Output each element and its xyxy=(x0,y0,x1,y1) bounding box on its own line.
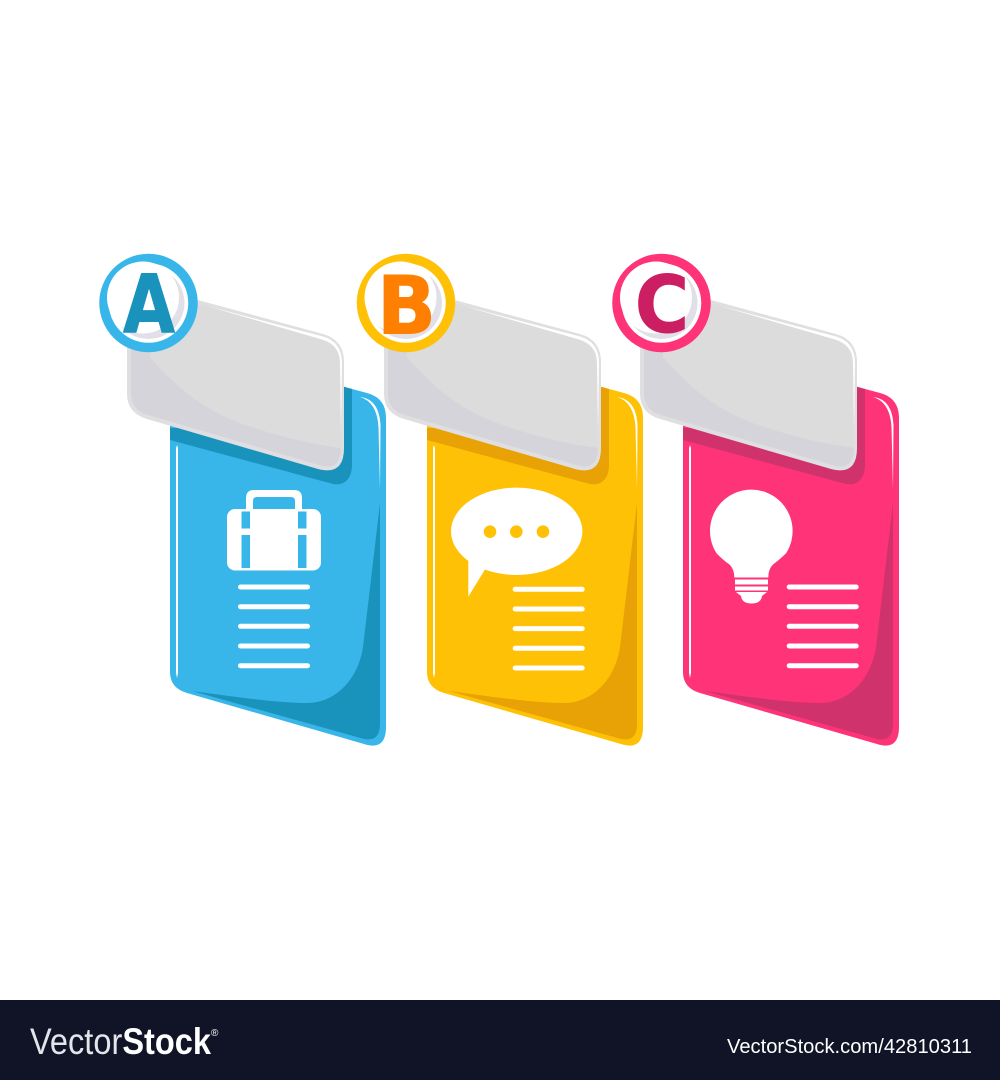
panel: option A xyxy=(104,258,386,746)
text lines xyxy=(513,587,585,670)
badge B xyxy=(362,258,450,352)
text lines xyxy=(787,584,859,668)
icon: speech bubble xyxy=(451,488,582,597)
image id: VectorStock.com/42810311 xyxy=(727,1035,972,1058)
yellow card xyxy=(427,340,643,746)
footer logo: VectorStock xyxy=(30,1021,211,1062)
icon: light bulb xyxy=(710,490,793,604)
panel: option C xyxy=(617,258,899,746)
badge A: A xyxy=(123,258,175,351)
pink card xyxy=(683,340,899,746)
grey label plate xyxy=(384,287,601,470)
badge A xyxy=(104,258,193,351)
badge C xyxy=(617,258,706,351)
grey label plate xyxy=(127,287,344,470)
grey label plate xyxy=(640,287,857,470)
badge B: B xyxy=(377,260,436,352)
badge C: C xyxy=(635,261,689,351)
blue card xyxy=(170,340,386,746)
registered mark: ® xyxy=(211,1028,219,1039)
text lines xyxy=(238,584,310,668)
icon: briefcase xyxy=(227,490,321,570)
panel: option B xyxy=(362,258,643,746)
footer bar xyxy=(0,1000,1000,1080)
